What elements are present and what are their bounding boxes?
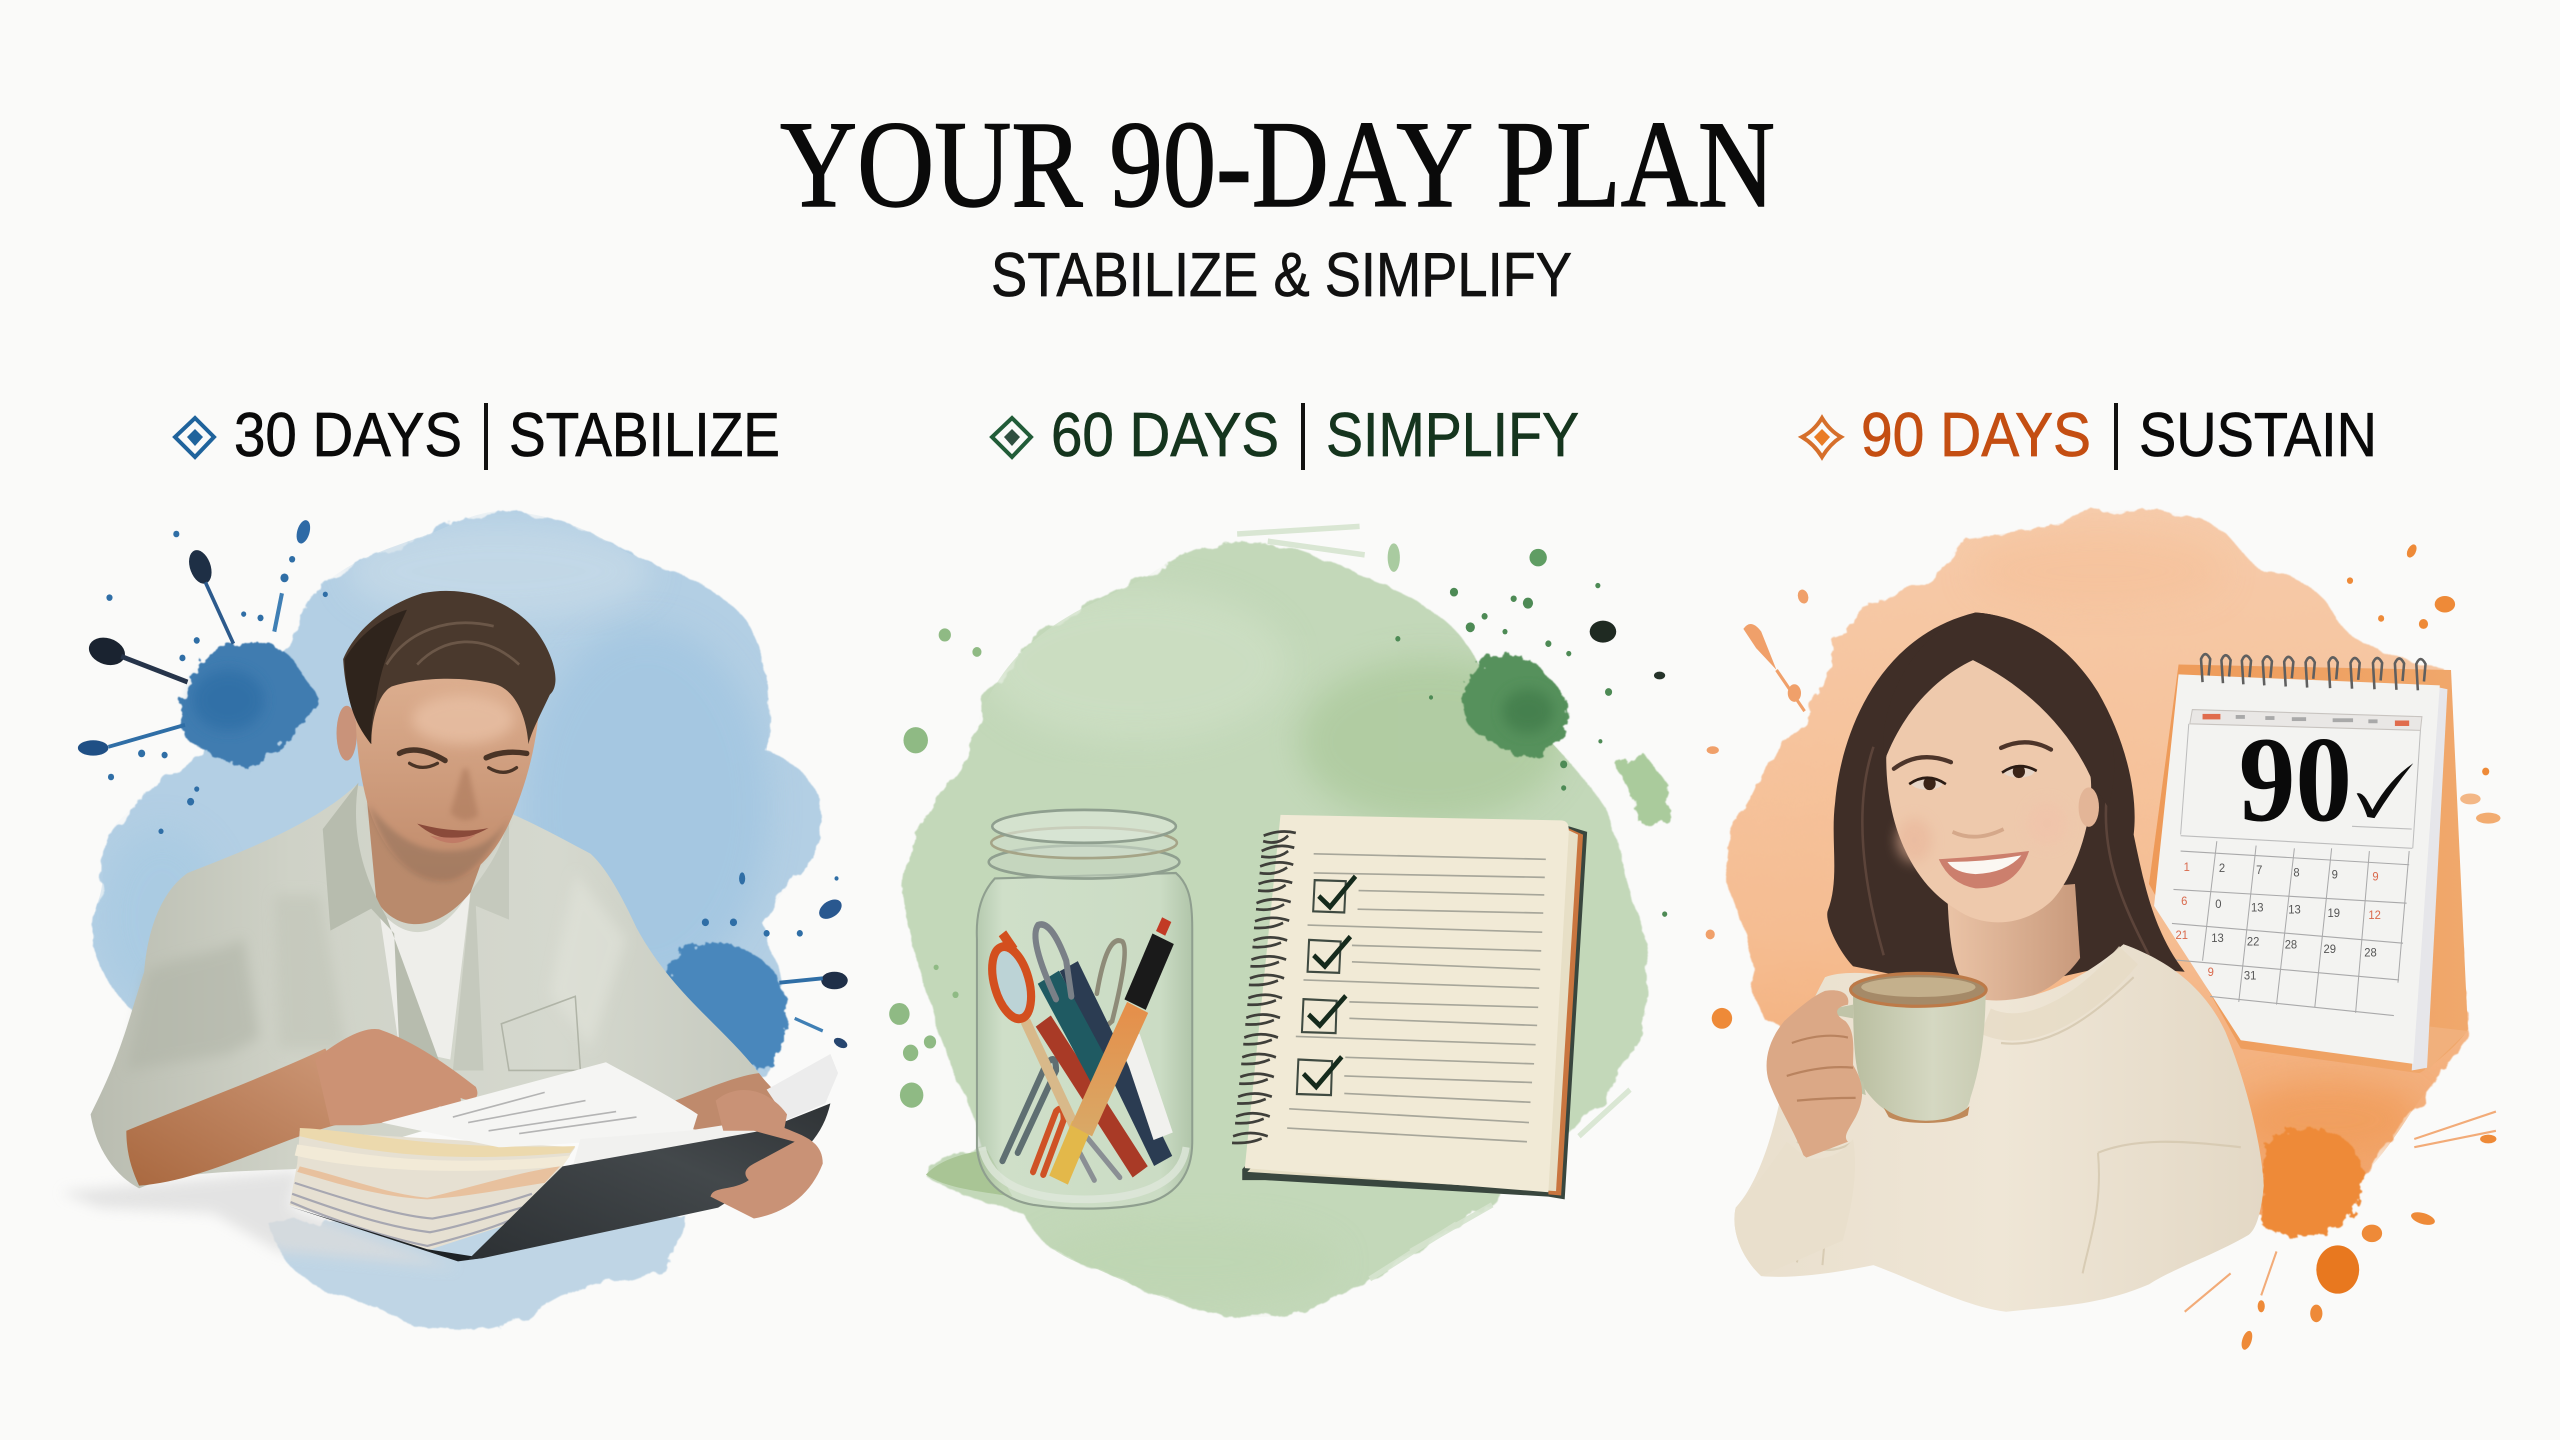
back cover [1242,825,1587,1199]
calendar dates: 13 [2211,932,2224,945]
left forearm [126,1048,361,1186]
right hand [711,1090,823,1219]
check mark [2357,763,2413,818]
collar right [453,813,509,1070]
paper stack [290,1128,575,1250]
calendar dates: 0 [2215,898,2222,911]
calendar dates: 9 [2372,870,2379,884]
hair highlights [1862,747,2149,955]
icon: blue diamond [175,418,214,457]
heading: 90 days [1802,401,2377,470]
navy pen [1069,966,1163,1161]
checkbox 1 [1313,876,1356,912]
calendar dates: 28 [2364,946,2377,959]
ink splat: lower right [668,872,849,1070]
face [355,676,540,881]
eyes [1909,765,2037,790]
calendar page [2154,674,2440,1064]
shirt [91,785,759,1188]
left hand [315,1029,477,1125]
paint splat: lower right [2185,543,2501,1351]
orange pen [1082,1007,1138,1131]
calendar dates: 8 [2293,866,2300,879]
watercolor wash: orange [1726,510,2467,1215]
hand holding mug [1767,990,1862,1158]
hair strands [387,623,519,665]
sweater [1734,944,2264,1312]
red marker [1043,1021,1140,1172]
glass jar [977,810,1192,1209]
shirt shading [126,873,626,1070]
sweater texture [1771,955,2241,1273]
label: sustain: SUSTAIN [2139,401,2377,470]
label: 60 days: 60 DAYS [1051,401,1279,470]
neck [1947,884,2080,1003]
calendar dates: 13 [2251,901,2263,914]
ear [337,706,357,761]
black folder [290,1206,483,1261]
calendar dates: 22 [2247,935,2259,948]
desk calendar [2149,654,2468,1073]
brows [1894,742,2051,769]
scissor loop [985,942,1038,1024]
spiral notebook [1232,815,1587,1199]
breast pocket [501,996,580,1070]
dry-brush streaks [1237,526,1630,1279]
label: 90 days: 90 DAYS [1861,401,2091,470]
spiral binding [1232,832,1296,1143]
page edge [1247,829,1578,1191]
paper clips [1002,1059,1056,1161]
nose [1953,829,2004,837]
ear [2079,787,2099,827]
face [1886,659,2091,922]
heading: 30 days [175,401,780,470]
table shadow [60,1170,458,1268]
calendar dates: 31 [2244,969,2256,982]
panel: 90 days, woman with mug and calendar [1706,510,2501,1351]
jar contents [985,920,1167,1180]
calendar rings [2201,654,2426,690]
strip labels [2203,714,2409,726]
paint drops: left side [1706,588,1810,1029]
calendar dates: 9 [2208,966,2214,979]
heading: 60 days [992,401,1579,470]
person: woman [1734,612,2264,1312]
teal pen [1048,977,1104,1081]
finger creases [1787,1036,1856,1101]
person: man [91,591,838,1261]
calendar dates: 2 [2219,862,2225,875]
separator bar [2114,403,2118,470]
calendar dates: 13 [2288,903,2301,917]
label: 30 days: 30 DAYS [234,401,462,470]
cheek blush [1896,802,2067,862]
calendar dates: 21 [2176,928,2188,942]
black barrel [1135,939,1163,1005]
jar glass base [982,1147,1186,1199]
checkbox 2 [1308,937,1350,973]
second sheet [573,1120,763,1166]
page [1245,815,1569,1192]
red tip [1161,920,1167,933]
page behind the hand [767,1054,838,1120]
hair [343,591,555,744]
calendar dates: 1 [2184,860,2190,874]
eyes and brows [399,750,527,772]
weekday strip [2190,710,2422,730]
pages edge [2412,686,2447,1070]
label: stabilize: STABILIZE [509,401,780,470]
calendar dates: 28 [2285,938,2297,952]
yellow tip [1059,1125,1082,1180]
orange clip bottom [1033,1109,1064,1175]
checkbox 4 [1297,1057,1342,1095]
panel: 60 days, jar and checklist notebook [889,526,1668,1317]
t-shirt [379,889,471,1059]
orange edge [1548,828,1583,1195]
cuff [1734,1139,1855,1276]
checkbox 3 [1302,996,1346,1033]
calendar dates: 6 [2181,894,2187,908]
mug [1825,973,1986,1123]
ink splat: upper right [1388,543,1668,917]
label: simplify: SIMPLIFY [1326,401,1579,470]
ink splat: upper left [78,518,328,834]
date grid [2172,841,2409,1016]
neck [364,763,483,924]
paint dots: left side [889,628,982,1108]
forehead highlight [412,695,514,744]
number 90: 90 [2239,713,2352,847]
jar neck [989,846,1179,878]
separator bar [1301,403,1305,470]
separator bar [484,403,488,470]
icon: orange diamond [1802,418,1841,457]
calendar dates: 29 [2323,943,2336,956]
gray clip [1035,924,1071,999]
collar left [323,782,443,1070]
hair parting [1883,612,2114,807]
calendar dates [2176,860,2381,982]
watercolor wash: green [903,526,1649,1317]
jar body [977,873,1192,1209]
top sheet [381,1062,698,1147]
title: YOUR 90-DAY PLAN [780,96,1775,233]
sheet writing [453,1092,637,1134]
calendar stand [2149,665,2468,1073]
calendar dates: 19 [2328,907,2340,920]
calendar dates: 9 [2332,868,2338,882]
header box [2181,724,2420,848]
ruled lines [1287,854,1546,1142]
hair back [1827,612,2185,994]
mouth [1939,851,2029,888]
smile [417,824,489,839]
watercolor wash: blue [93,511,823,1331]
calendar dates: 12 [2368,909,2381,922]
icon: green diamond [992,418,1031,457]
panel: 30 days, man reviewing papers [60,511,849,1331]
white pen [1130,1038,1163,1136]
stubble [369,804,509,881]
scissor stem [1025,1021,1082,1142]
calendar dates: 7 [2256,864,2262,877]
subtitle: STABILIZE & SIMPLIFY [991,241,1572,310]
nose shadow [450,769,478,820]
dark hair side [345,610,407,744]
right forearm [667,1073,787,1131]
